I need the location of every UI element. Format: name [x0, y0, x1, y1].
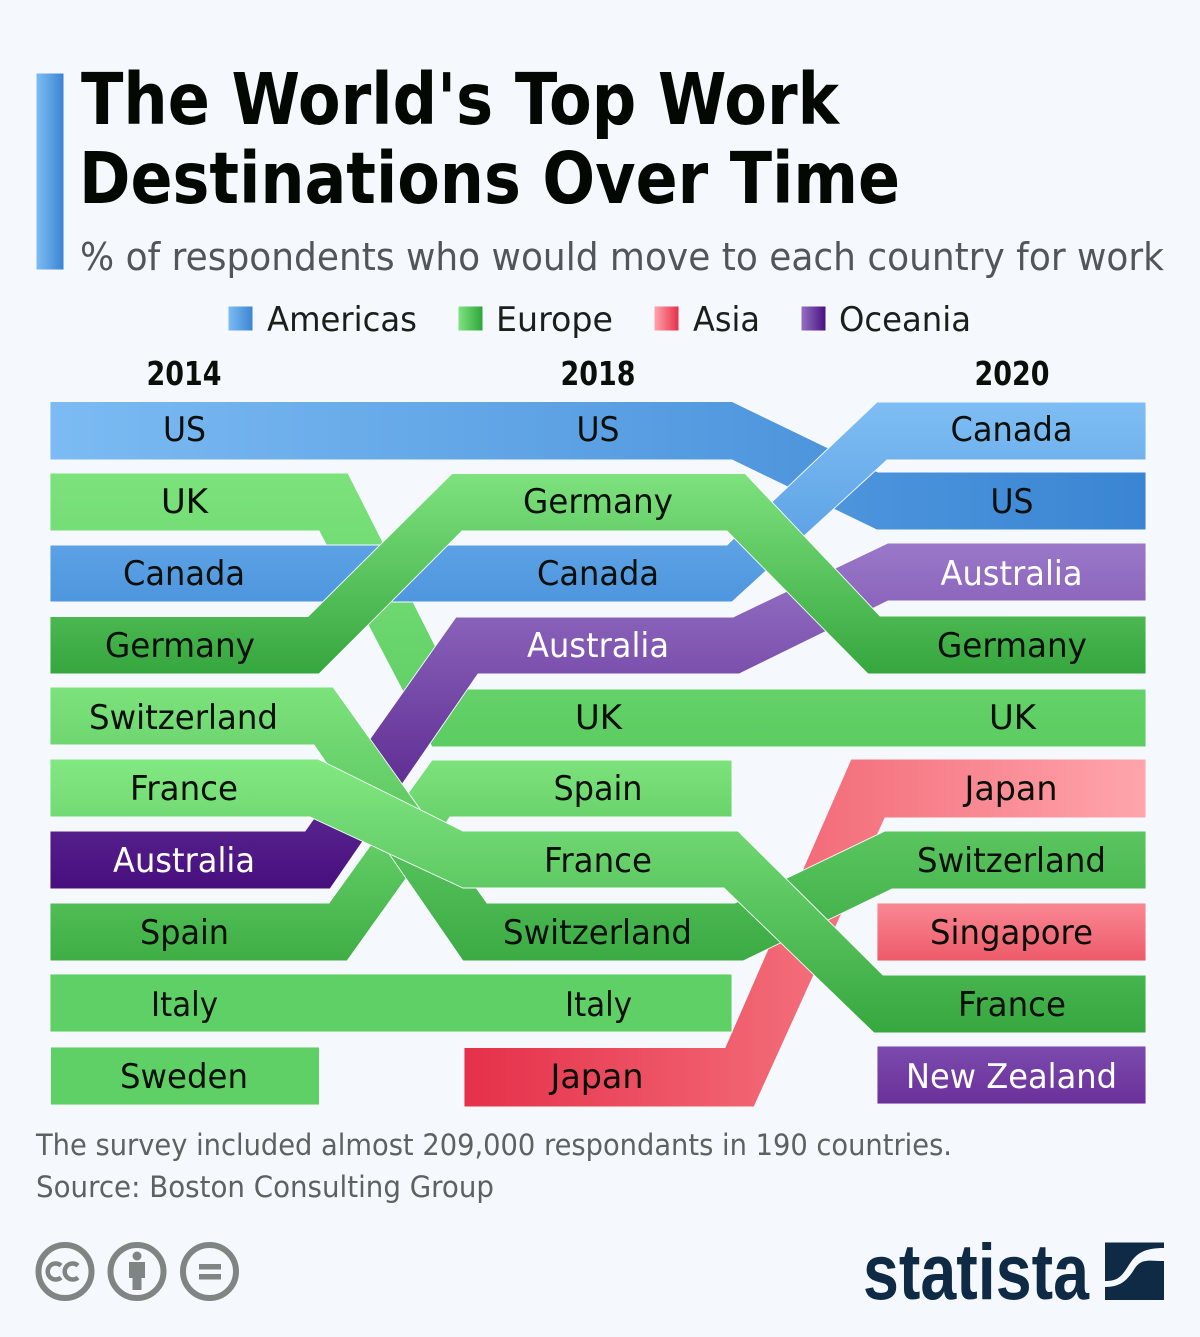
ribbon: France	[50, 759, 1146, 1033]
labels 2014: Australia	[113, 841, 255, 881]
labels 2018: Australia	[527, 626, 669, 666]
ribbon: Germany	[50, 474, 1146, 674]
ribbon: US	[50, 402, 1146, 530]
bar: Singapore	[877, 903, 1146, 961]
labels 2020: Canada	[950, 410, 1072, 450]
footnote: Source: Boston Consulting Group	[36, 1170, 494, 1204]
labels 2018: Italy	[565, 985, 632, 1025]
footnote: The survey included almost 209,000 respondants in 190 countries.	[35, 1128, 952, 1162]
labels 2020: Switzerland	[917, 841, 1106, 881]
labels 2020: Germany	[937, 626, 1087, 666]
title: The World's Top Work	[81, 58, 841, 141]
labels 2014: Spain	[140, 913, 229, 953]
labels 2020: New Zealand	[906, 1057, 1117, 1097]
ribbon: Spain	[50, 760, 732, 961]
labels 2020: Japan	[963, 769, 1058, 809]
icon: creative commons CC	[38, 1245, 92, 1298]
legend	[228, 300, 971, 340]
labels 2014	[89, 410, 278, 1097]
labels 2014: France	[130, 769, 238, 809]
bar: Sweden	[50, 1047, 320, 1105]
labels 2018: Japan	[549, 1057, 644, 1097]
labels 2014: Sweden	[120, 1057, 248, 1097]
year headers: 2018	[560, 354, 636, 393]
ribbon: Japan	[464, 759, 1146, 1107]
subtitle: % of respondents who would move to each country for work	[80, 235, 1164, 279]
title accent bar	[36, 74, 64, 270]
labels 2020: US	[990, 482, 1034, 522]
labels 2014: Germany	[105, 626, 255, 666]
title: Destinations Over Time	[79, 137, 900, 220]
labels 2014: Canada	[123, 554, 245, 594]
labels 2018: UK	[575, 698, 624, 738]
legend item: Asia	[654, 300, 760, 340]
ribbon: UK	[50, 473, 1146, 747]
labels 2018	[503, 410, 692, 1097]
footnote	[35, 1128, 952, 1204]
statista wordmark: statista	[863, 1227, 1090, 1316]
year headers	[146, 354, 1050, 393]
icon: attribution person	[110, 1245, 164, 1298]
labels 2020: France	[958, 985, 1066, 1025]
ribbon: Australia	[50, 543, 1146, 889]
labels 2018: Switzerland	[503, 913, 692, 953]
ribbon chart	[50, 402, 1146, 1107]
ribbon: Canada	[50, 402, 1146, 602]
title	[79, 58, 900, 220]
labels 2020	[906, 410, 1117, 1097]
labels 2018: France	[544, 841, 652, 881]
labels 2020: Singapore	[930, 913, 1093, 953]
legend item: Europe: Europe	[496, 300, 613, 340]
year headers: 2014	[146, 354, 222, 393]
legend item: Americas: Americas	[267, 300, 417, 340]
labels 2020: UK	[989, 698, 1038, 738]
bar: Italy	[50, 974, 732, 1032]
statista logo mark	[1105, 1242, 1164, 1300]
labels 2014: US	[163, 410, 206, 450]
labels 2018: Canada	[537, 554, 659, 594]
legend item: Oceania: Oceania	[839, 300, 971, 340]
year headers: 2020	[974, 354, 1050, 393]
labels 2020: Australia	[940, 554, 1082, 594]
ribbon: Switzerland	[50, 687, 1146, 961]
labels 2014: Italy	[151, 985, 218, 1025]
labels 2018: US	[576, 410, 620, 450]
bar: New Zealand	[877, 1046, 1146, 1104]
labels 2018: Germany	[523, 482, 673, 522]
labels 2014: Switzerland	[89, 698, 278, 738]
legend item: Asia: Asia	[693, 300, 760, 340]
labels 2018: Spain	[554, 769, 642, 809]
icon: no derivatives equals	[183, 1245, 236, 1298]
labels 2014: UK	[161, 482, 210, 522]
